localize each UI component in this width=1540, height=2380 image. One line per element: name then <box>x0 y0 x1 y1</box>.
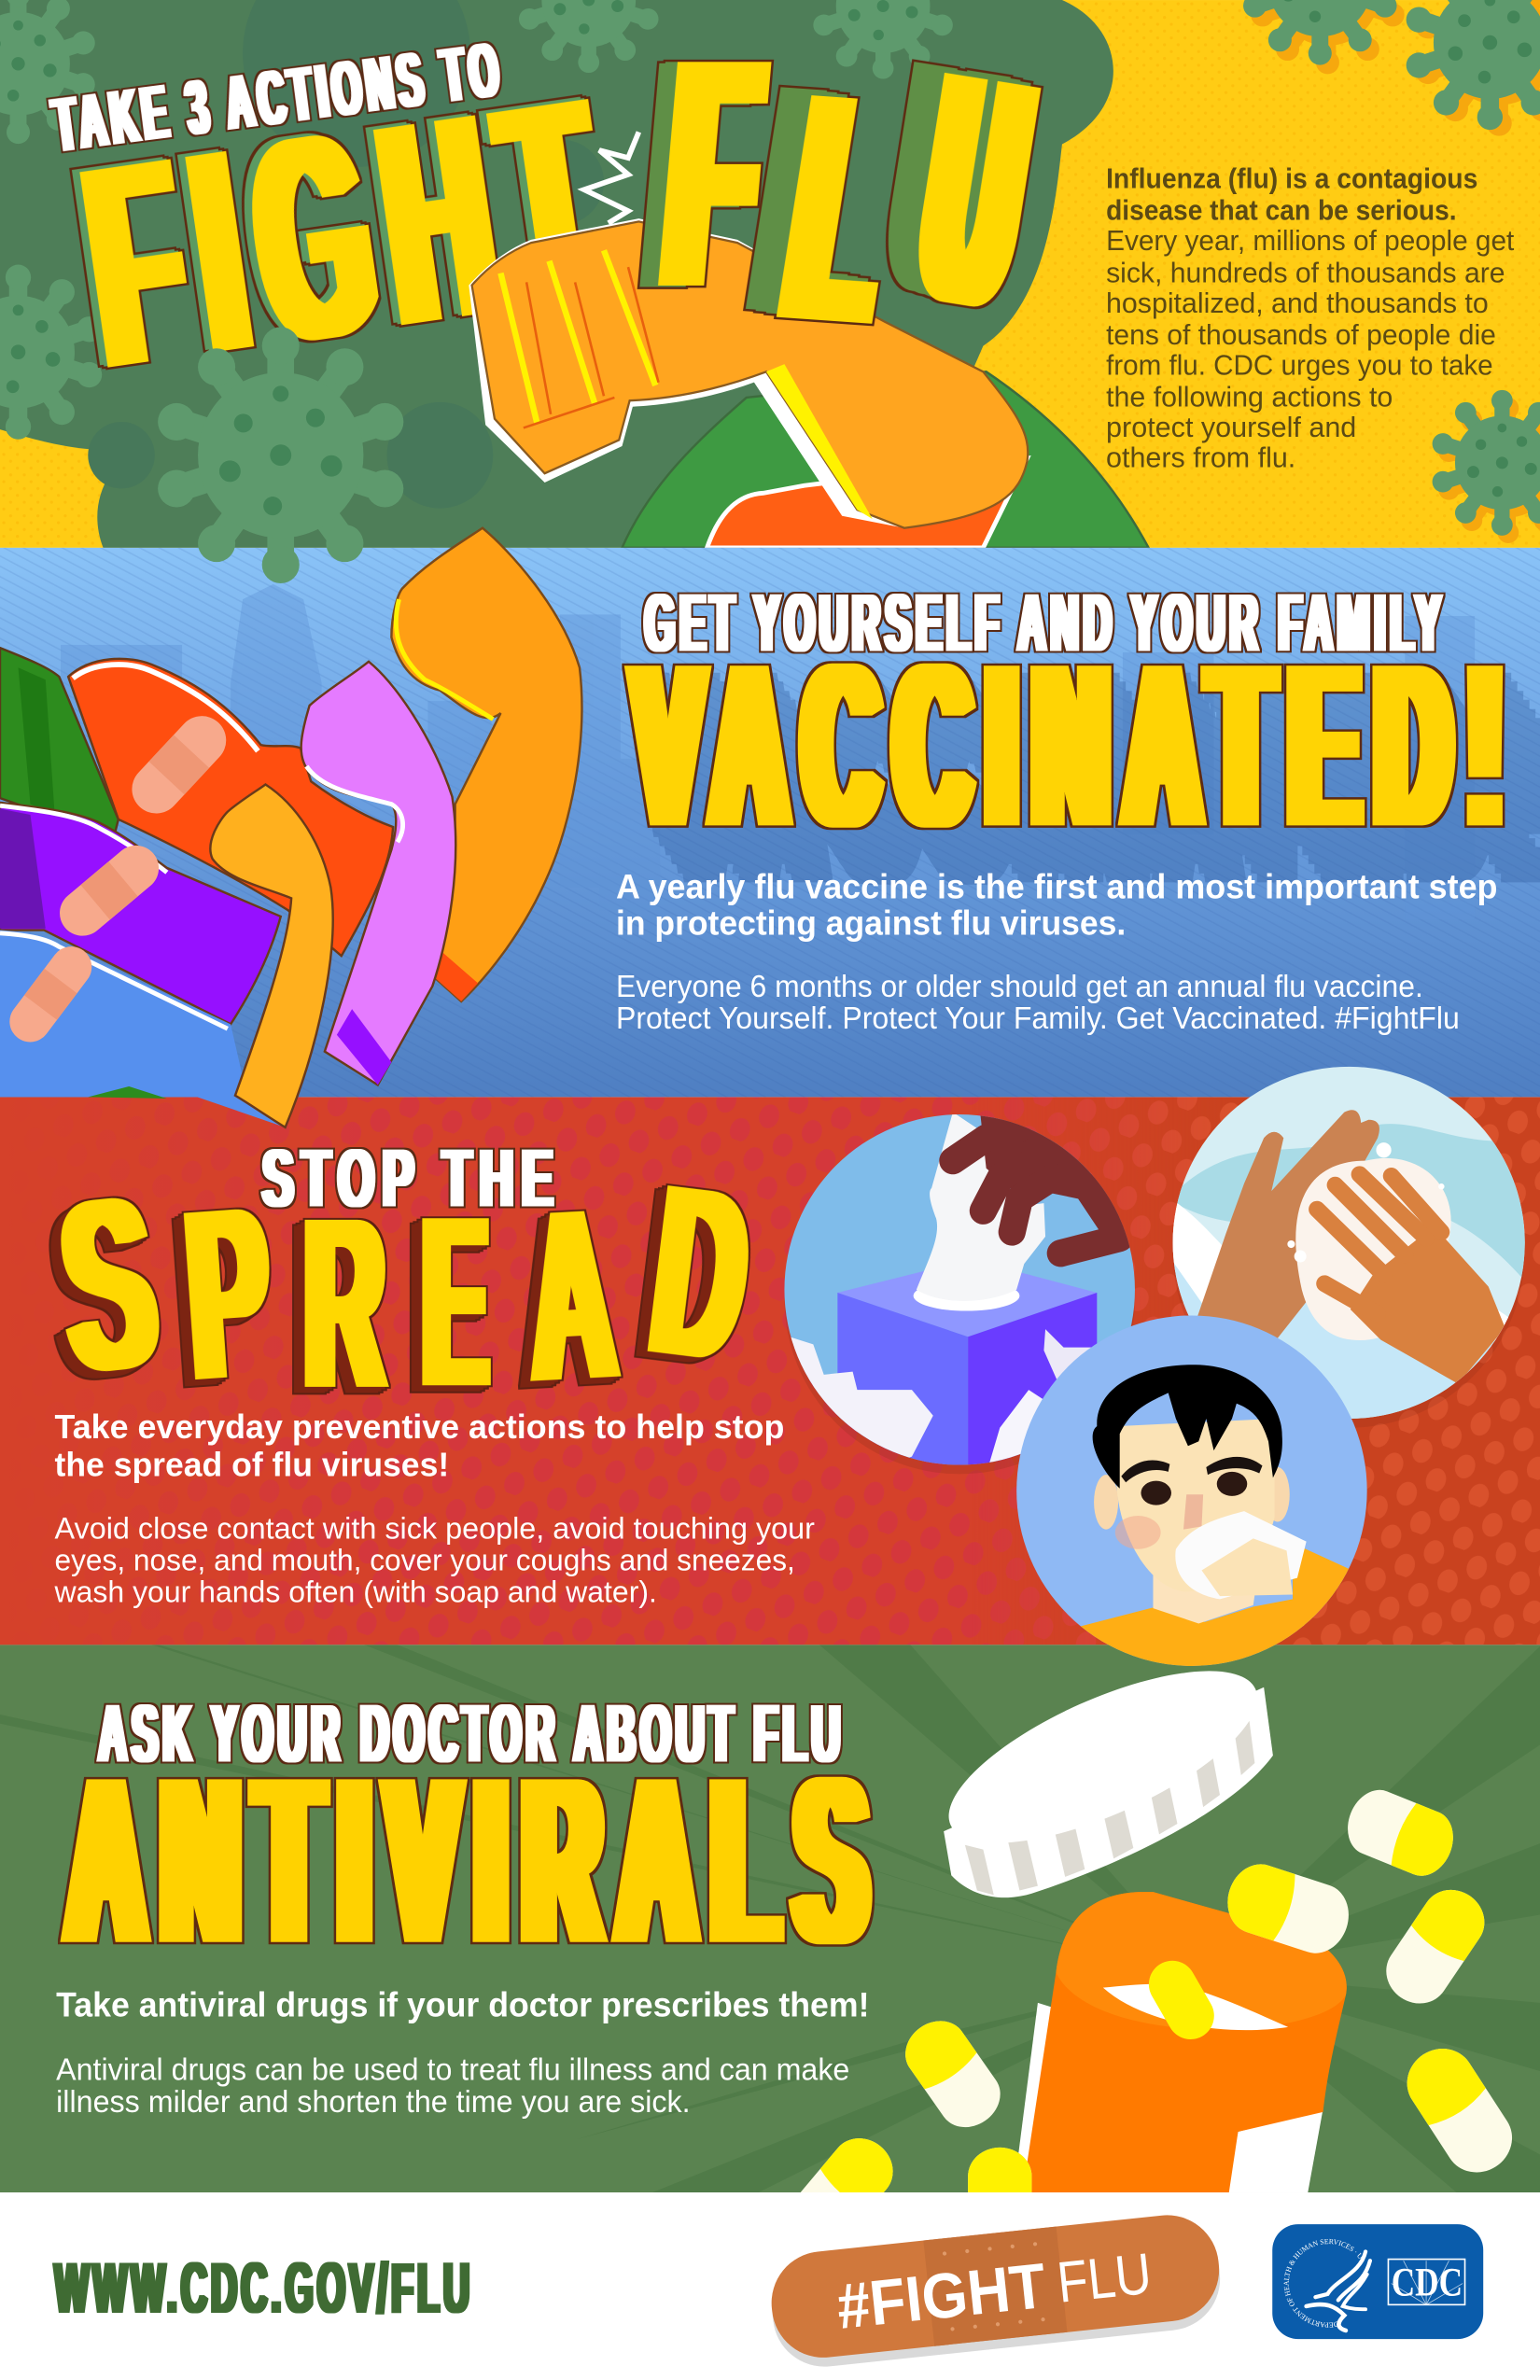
panel: stop the spread <box>0 1097 1540 1645</box>
city skyline <box>61 584 1475 919</box>
illustration: small orange flexed arm <box>210 784 333 1127</box>
icon: large virus overlapping blue panel <box>158 327 403 583</box>
body text: antivirals: Antiviral drugs can be used to treat flu illness and can make <box>56 2053 849 2088</box>
bandage: #fight flu <box>766 2210 1225 2372</box>
body text: stop the spread: wash your hands often (with soap and water). <box>54 1575 657 1609</box>
body text: stop the spread: eyes, nose, and mouth, cover your coughs and sneezes, <box>55 1544 795 1577</box>
panel background: yellow <box>0 0 1540 548</box>
bandage: #fight flu: #FIGHT <box>833 2250 1049 2343</box>
body text: stop the spread <box>54 1511 815 1609</box>
illustration: orange sleeve <box>707 458 1028 548</box>
sunburst rays <box>0 1645 1540 2192</box>
subheading: preventive actions: the spread of flu viruses! <box>55 1446 449 1484</box>
icon: impact lightning <box>584 132 638 223</box>
viruses on green <box>0 0 953 440</box>
intro text: sick, hundreds of thousands are <box>1106 258 1505 288</box>
heading: stop the: STOP THE <box>262 1132 561 1224</box>
illustration: orange flexed arm <box>391 528 581 1001</box>
intro text: the following actions to <box>1106 383 1393 413</box>
illustration: punching arm and fist <box>469 218 1028 528</box>
intro text: Influenza (flu) is a contagious <box>1106 164 1477 195</box>
subheading: antiviral drugs: Take antiviral drugs if your doctor prescribes them! <box>56 1984 869 2023</box>
body text: vaccinated <box>616 970 1460 1036</box>
icon: bandage red arm <box>122 706 236 823</box>
body text: antivirals: illness milder and shorten the time you are sick. <box>56 2085 691 2120</box>
panel background: blue gradient <box>0 548 1540 1097</box>
heading: spread <box>51 1134 761 1439</box>
intro text: tens of thousands of people die <box>1106 320 1496 351</box>
darker cloud shapes <box>88 0 604 509</box>
illustration: orange pill bottle <box>1014 1892 1347 2192</box>
circle: tissue box <box>784 1113 1141 1479</box>
diagonal hatch <box>0 548 1540 1097</box>
illustration: green shirt <box>623 371 1149 548</box>
subheading: yearly flu vaccine: in protecting against flu viruses. <box>616 903 1126 942</box>
intro text: others from flu. <box>1106 443 1295 474</box>
intro text: hospitalized, and thousands to <box>1106 288 1489 319</box>
panel shading left <box>0 1097 364 1645</box>
intro text: protect yourself and <box>1106 413 1356 443</box>
heading: flu 3d letters: F <box>657 0 768 349</box>
logo: CDC and HHS: DEPARTMENT OF HEALTH & HUMAN SERVICES · USA <box>1284 2238 1363 2328</box>
bandage: #fight flu: FLU <box>1054 2242 1155 2316</box>
illustration: three action circles <box>784 1067 1540 1684</box>
logo: CDC and HHS: CDC <box>1392 2261 1463 2305</box>
subheading: preventive actions <box>55 1407 784 1484</box>
heading: spread: E <box>424 1167 487 1437</box>
circle: hand washing <box>1169 1067 1540 1428</box>
panel background: green <box>0 1645 1540 2192</box>
panel background: red with dots <box>0 1097 1540 1645</box>
website url: WWW.CDC.GOV/FLU <box>55 2248 473 2328</box>
illustration: purple arm <box>0 803 281 1024</box>
circle: person with tissue <box>1016 1315 1367 1684</box>
illustration: pink flexed arm <box>301 662 455 1085</box>
footer background <box>0 2192 1540 2380</box>
panel: get vaccinated <box>0 528 1540 1127</box>
heading: spread: P <box>179 1156 277 1432</box>
heading: spread: S <box>51 1146 167 1424</box>
intro text <box>1106 164 1515 474</box>
icon: bandage blue arm <box>2 938 100 1050</box>
heading: spread: A <box>524 1158 620 1433</box>
panel: antivirals <box>0 1645 1540 2192</box>
illustration: green arm <box>0 648 119 837</box>
icon: bandage purple arm <box>50 836 168 945</box>
green cloud background <box>0 0 1113 548</box>
illustration: blue arm <box>0 931 286 1127</box>
body text: antivirals <box>56 2053 849 2120</box>
subheading: yearly flu vaccine: A yearly flu vaccine is the first and most important step <box>616 866 1497 905</box>
icon: capsules <box>779 1782 1524 2268</box>
subheading: yearly flu vaccine <box>616 866 1497 942</box>
panel: fight flu intro: U <box>906 9 1045 371</box>
subheading: preventive actions: Take everyday preventive actions to help stop <box>55 1407 784 1446</box>
intro text: Every year, millions of people get <box>1106 226 1515 257</box>
panel: fight flu intro <box>0 0 1540 548</box>
heading: flu 3d letters <box>657 0 1045 386</box>
virus shadows on yellow <box>1251 0 1540 543</box>
heading: spread: D <box>640 1134 761 1414</box>
panel dots: orange right <box>971 1097 1540 1645</box>
illustration: bottle cap <box>927 1636 1279 1897</box>
body text: stop the spread: Avoid close contact with sick people, avoid touching your <box>55 1511 815 1545</box>
illustration: red arm <box>68 659 393 956</box>
intro text: disease that can be serious. <box>1106 196 1457 227</box>
body text: vaccinated: Everyone 6 months or older should get an annual flu vaccine. <box>616 970 1423 1004</box>
heading: spread: R <box>305 1169 384 1439</box>
body text: vaccinated: Protect Yourself. Protect Your Family. Get Vaccinated. #FightFlu <box>616 1001 1460 1036</box>
heading: flu 3d letters: L <box>771 31 908 386</box>
viruses on yellow <box>1243 0 1540 536</box>
intro text: from flu. CDC urges you to take <box>1106 351 1493 382</box>
